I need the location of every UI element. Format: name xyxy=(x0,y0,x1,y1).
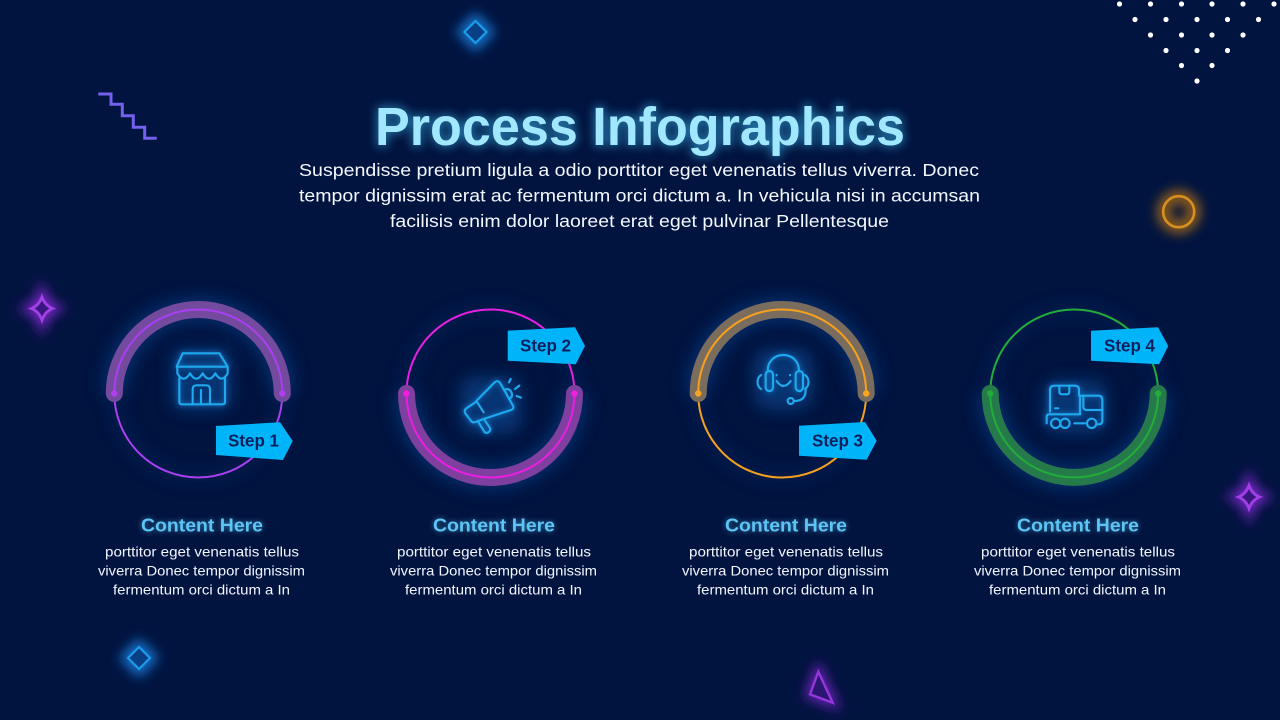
step 3 text: fermentum orci dictum a In xyxy=(697,583,874,598)
step 3 tag: Step 3 xyxy=(812,431,863,451)
intro paragraph: Suspendisse pretium ligula a odio porttitor eget venenatis tellus viverra. Donec xyxy=(299,160,979,180)
icon: headset xyxy=(753,348,813,410)
step 1 text xyxy=(98,545,305,598)
decoration: right sparkle xyxy=(1238,486,1260,508)
step 1 text: fermentum orci dictum a In xyxy=(113,583,290,598)
step 1 tag: Step 1 xyxy=(228,431,279,451)
step 2 text: fermentum orci dictum a In xyxy=(405,583,582,598)
step 2 panel xyxy=(390,310,597,598)
decoration: dot triangle xyxy=(1117,1,1277,84)
icon: megaphone xyxy=(460,377,522,433)
icon: storefront xyxy=(172,348,232,410)
step 3 heading: Content Here xyxy=(725,515,847,536)
step 3 ring xyxy=(695,310,869,478)
step 1 text: porttitor eget venenatis tellus xyxy=(105,545,299,560)
step 1 heading: Content Here xyxy=(141,515,263,536)
step 2 tag: Step 2 xyxy=(520,336,571,356)
step 1 ring xyxy=(111,310,285,478)
step 4 ring xyxy=(987,310,1161,478)
step 3 text: viverra Donec tempor dignissim xyxy=(682,564,889,579)
step 1 heading: Content Here xyxy=(141,515,263,536)
step 3 panel xyxy=(682,310,889,598)
title: Process Infographics xyxy=(375,97,905,157)
step 2 text: viverra Donec tempor dignissim xyxy=(390,564,597,579)
step 2 text xyxy=(390,545,597,598)
step 4 tag xyxy=(1091,327,1168,364)
step 4 panel xyxy=(974,310,1181,598)
step 3 text xyxy=(682,545,889,598)
intro paragraph: facilisis enim dolor laoreet erat eget pulvinar Pellentesque xyxy=(390,211,889,231)
step 2 ring xyxy=(403,310,578,478)
title: Process Infographics xyxy=(375,97,905,157)
step 4 text: viverra Donec tempor dignissim xyxy=(974,564,1181,579)
step 1 text: viverra Donec tempor dignissim xyxy=(98,564,305,579)
decoration: bottom diamond xyxy=(126,645,152,671)
step 4 text: fermentum orci dictum a In xyxy=(989,583,1166,598)
step 1 panel xyxy=(98,310,305,598)
step 4 text: porttitor eget venenatis tellus xyxy=(981,545,1175,560)
icon: delivery truck xyxy=(1043,380,1107,433)
step 3 tag xyxy=(799,422,877,460)
intro paragraph: tempor dignissim erat ac fermentum orci dictum a. In vehicula nisi in accumsan xyxy=(299,186,980,206)
step 4 text xyxy=(974,545,1181,598)
step 4 heading: Content Here xyxy=(1017,515,1139,536)
decoration: left sparkle xyxy=(32,297,52,320)
step 1 tag xyxy=(216,422,293,460)
decoration: zigzag stairs xyxy=(98,94,157,138)
decoration: triangle xyxy=(810,672,833,703)
intro paragraph xyxy=(299,160,980,231)
step 2 heading: Content Here xyxy=(433,515,555,536)
decoration: top diamond xyxy=(462,19,488,45)
step 4 tag: Step 4 xyxy=(1104,336,1155,356)
step 2 heading: Content Here xyxy=(433,515,555,536)
step 2 tag xyxy=(508,327,585,364)
step 3 text: porttitor eget venenatis tellus xyxy=(689,545,883,560)
decoration: orange ring xyxy=(1163,196,1194,227)
step 3 heading: Content Here xyxy=(725,515,847,536)
step 2 text: porttitor eget venenatis tellus xyxy=(397,545,591,560)
step 4 heading: Content Here xyxy=(1017,515,1139,536)
